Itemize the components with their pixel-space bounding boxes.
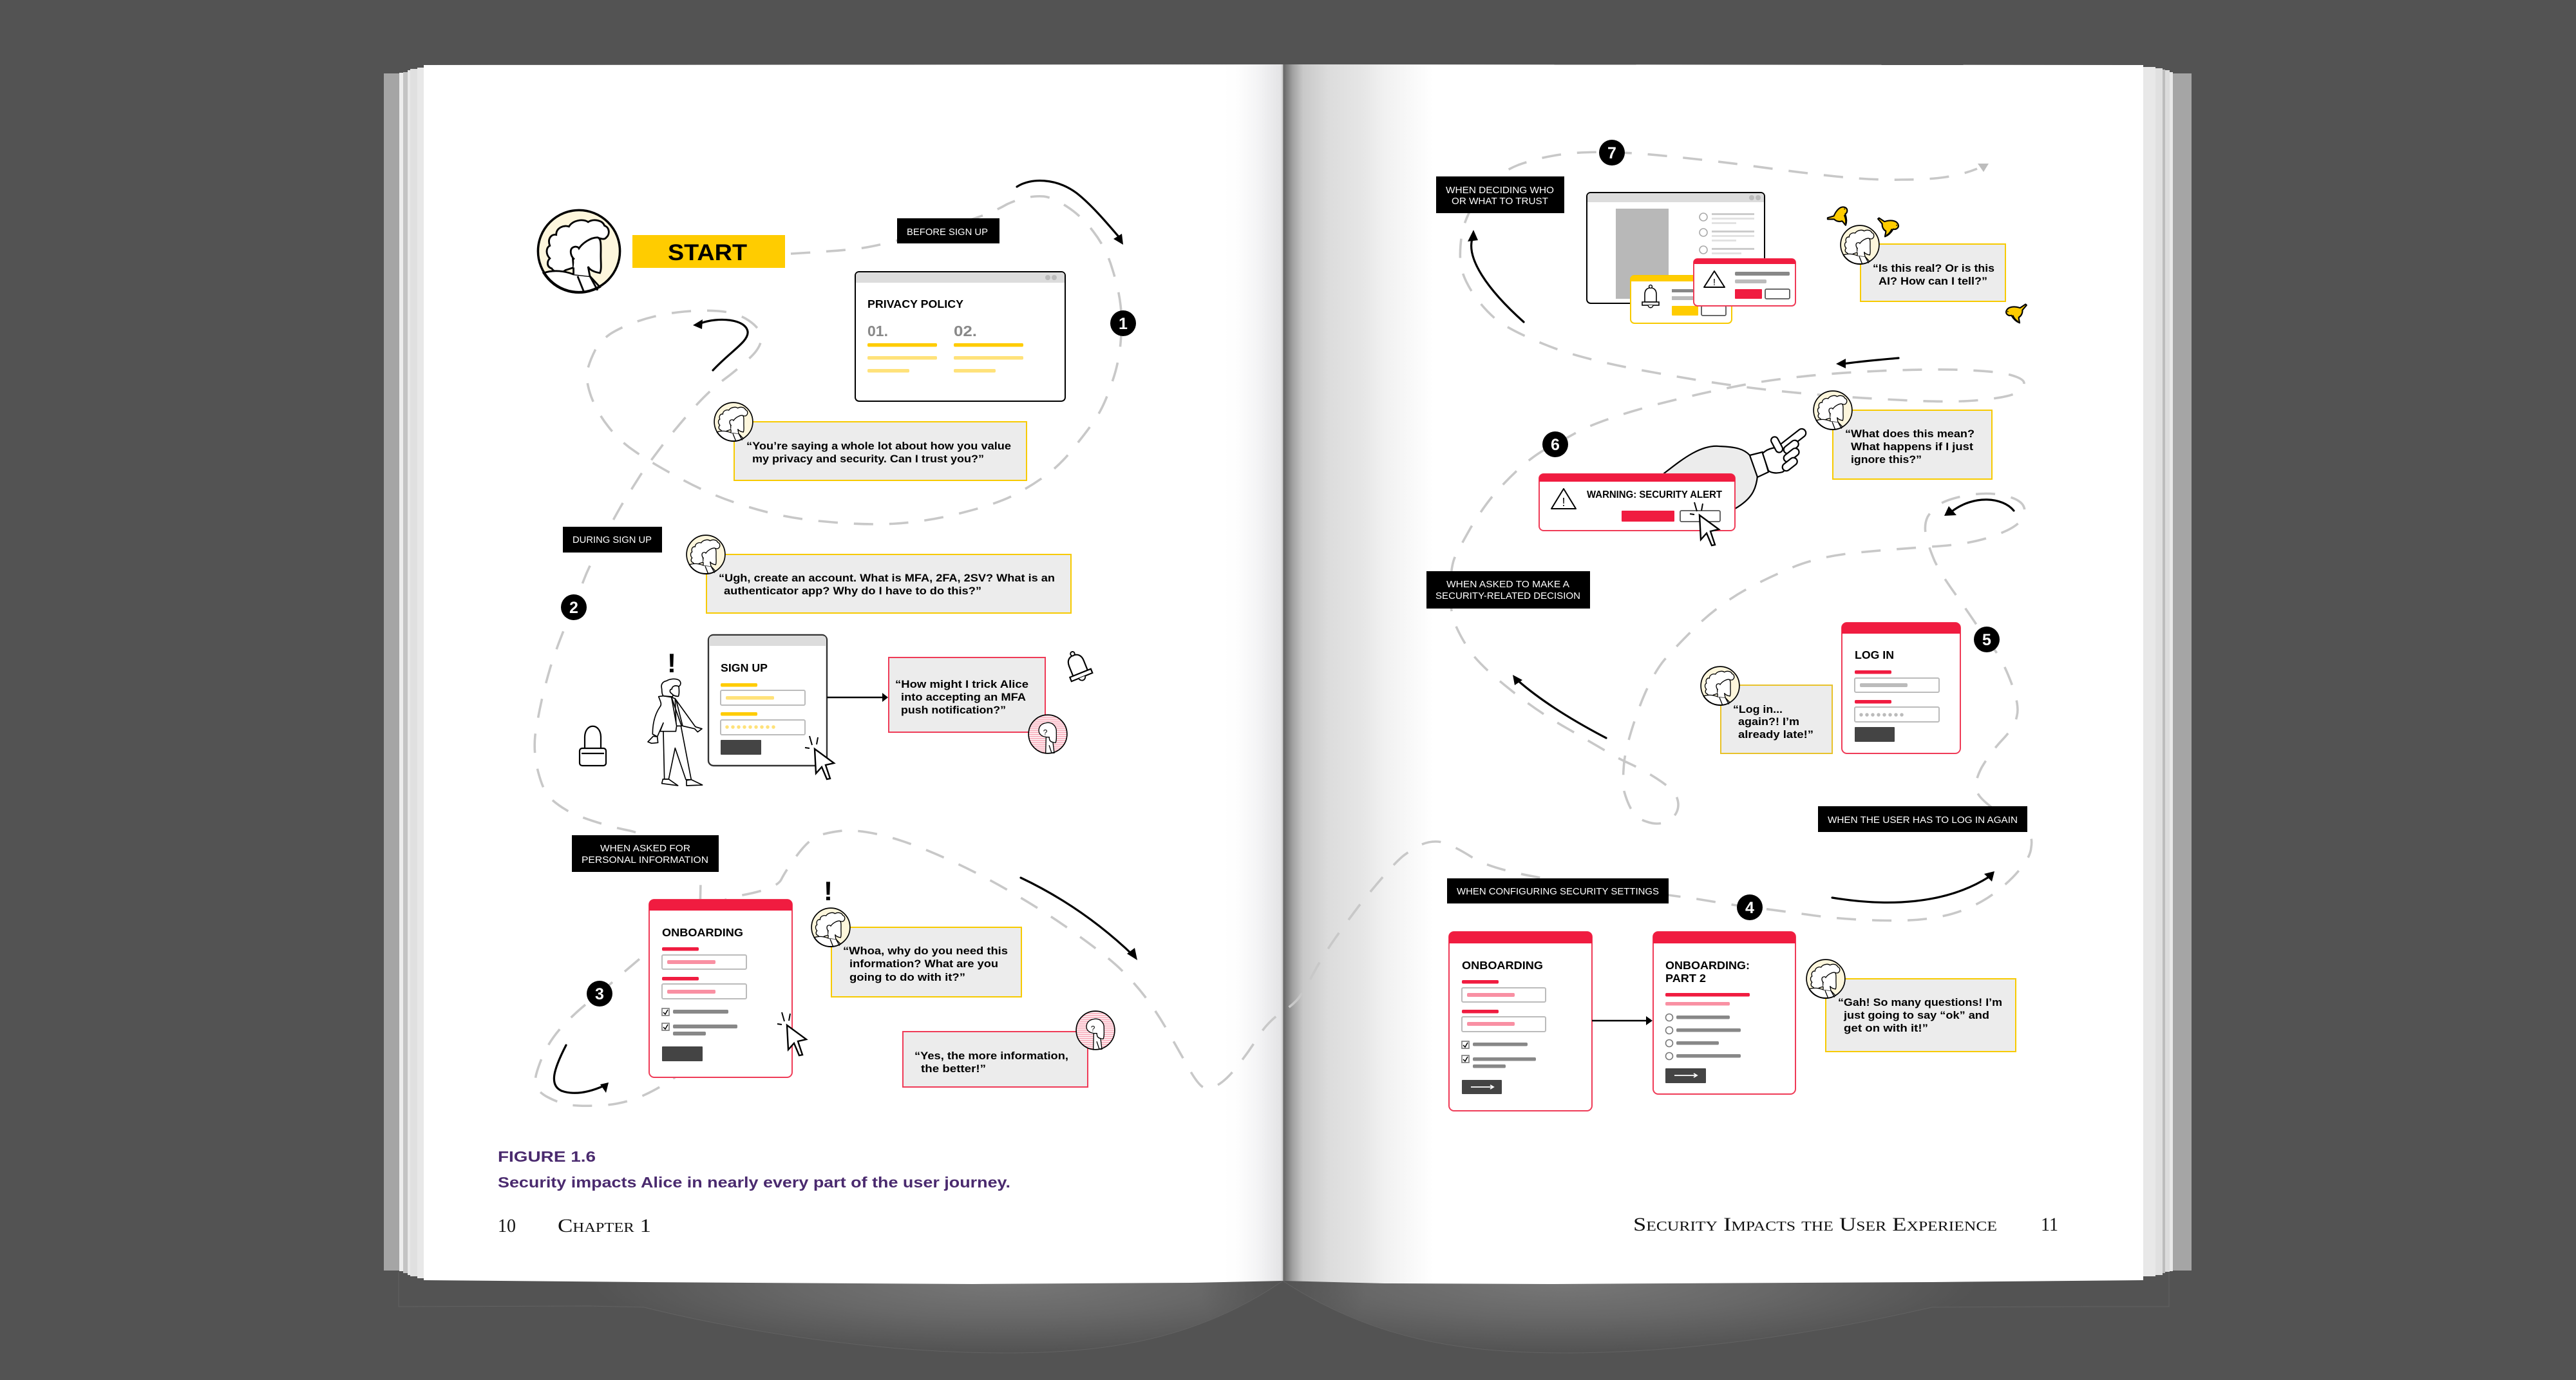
curved arrow step 5	[1944, 500, 2014, 516]
speech bubble: create an account	[706, 554, 1071, 613]
onboarding card part 2: ONBOARDING:	[1665, 959, 1750, 972]
left page footer	[498, 1215, 651, 1236]
label: before sign up	[897, 218, 999, 243]
looping arrow	[693, 319, 748, 370]
speech bubble: attacker MFA	[889, 657, 1045, 732]
long arrow to decision	[1513, 675, 1606, 738]
privacy policy window: PRIVACY POLICY	[867, 298, 963, 310]
icon: lock	[580, 726, 606, 766]
left page	[424, 64, 1283, 1284]
speech bubble: so many questions: “Gah! So many questions! I’m	[1838, 997, 2002, 1008]
step number 6	[1542, 431, 1568, 457]
dashed journey path	[535, 152, 2032, 1106]
speech bubble: log in again	[1721, 685, 1832, 753]
step number 3: 3	[595, 985, 604, 1003]
arrow between cards	[1592, 1016, 1653, 1025]
label: personal information	[572, 835, 719, 872]
label: log in again	[1818, 806, 2027, 832]
step number 6: 6	[1551, 436, 1560, 454]
label: who or what to trust	[1436, 176, 1564, 213]
red alert: !	[1713, 277, 1716, 288]
step number 5: 5	[1982, 631, 1991, 649]
right page footer: 11	[2041, 1214, 2058, 1235]
speech bubble: can I trust you: “You’re saying a whole lot about how you value	[746, 440, 1011, 452]
step number 5	[1974, 627, 2000, 652]
speech bubble: log in again: already late!”	[1738, 729, 1814, 741]
pointing hand with sleeve	[1664, 427, 1808, 509]
start label	[632, 235, 785, 268]
exclamation mark: !	[824, 876, 833, 906]
speech bubble: attacker MFA: push notification?”	[901, 704, 1006, 716]
shadow under right page	[1320, 1282, 1898, 1338]
cursor	[777, 1012, 806, 1055]
step number 1: 1	[1119, 315, 1128, 333]
warning dialog	[1539, 474, 1735, 531]
shadow under left page	[672, 1281, 1246, 1338]
right page footer: Security Impacts the User Experience	[1633, 1214, 1997, 1235]
sign up window	[708, 635, 827, 766]
curved arrow 1	[1017, 181, 1123, 245]
speech bubble: create an account: authenticator app? Why do I have to do this?”	[724, 585, 981, 597]
cursor	[805, 736, 834, 779]
figure caption: FIGURE 1.6	[498, 1148, 596, 1165]
speech bubble: log in again: again?! I’m	[1738, 716, 1799, 728]
label: security decision: WHEN ASKED TO MAKE A	[1446, 580, 1569, 590]
Alice avatar small	[714, 402, 753, 441]
step number 2	[561, 594, 587, 620]
left page edge stack	[384, 68, 424, 1278]
cursor	[1690, 502, 1719, 545]
speech bubble: so many questions: get on with it!”	[1844, 1023, 1928, 1034]
speech bubble: why do you need	[831, 927, 1021, 997]
onboarding card	[649, 900, 792, 1077]
warning dialog: WARNING: SECURITY ALERT	[1587, 489, 1722, 500]
speech bubble: the more information: the better!”	[921, 1063, 986, 1075]
speech bubble: so many questions	[1826, 979, 2016, 1052]
speech bubble: can I trust you: my privacy and security. Can I trust you?”	[752, 453, 984, 465]
step number 3	[587, 981, 612, 1007]
speech bubble: what does this mean: What happens if I just	[1851, 441, 1974, 453]
label: personal information: WHEN ASKED FOR	[600, 844, 690, 854]
curved arrow step 3	[554, 1045, 609, 1093]
Alice avatar small	[1841, 225, 1879, 264]
privacy policy window: 02.	[954, 323, 977, 339]
Alice avatar small	[1701, 666, 1739, 705]
speech bubble: can I trust you	[734, 422, 1027, 480]
speech bubble: why do you need: going to do with it?”	[849, 972, 965, 983]
icon: bell	[1061, 648, 1094, 685]
speech bubble: why do you need: “Whoa, why do you need this	[843, 945, 1008, 957]
walking figure of Alice	[648, 679, 703, 786]
left page footer: 10	[498, 1215, 516, 1236]
label: security settings	[1447, 878, 1669, 903]
right page	[1283, 64, 2143, 1284]
speech bubble: attacker MFA: into accepting an MFA	[901, 692, 1026, 703]
attacker avatar	[1028, 715, 1067, 753]
label: security decision	[1426, 571, 1590, 609]
speech bubble: attacker MFA: “How might I trick Alice	[895, 679, 1028, 690]
speech bubble: is this real: “Is this real? Or is this	[1873, 263, 1994, 274]
step number 7	[1599, 140, 1625, 165]
speech bubble: log in again: “Log in...	[1733, 704, 1783, 715]
label: before sign up: BEFORE SIGN UP	[907, 227, 988, 238]
speech bubble: the more information: “Yes, the more information,	[914, 1050, 1068, 1062]
privacy policy window: 01.	[867, 323, 888, 339]
onboarding card: ONBOARDING	[662, 926, 743, 939]
attacker avatar	[1076, 1011, 1115, 1050]
Alice avatar small	[1814, 391, 1852, 430]
news window	[1587, 193, 1765, 303]
speech bubble: is this real	[1861, 244, 2005, 301]
speech bubble: what does this mean: “What does this mean?	[1845, 428, 1975, 440]
label: during sign up	[563, 527, 662, 553]
label: during sign up: DURING SIGN UP	[573, 535, 652, 545]
speech bubble: what does this mean: ignore this?”	[1851, 454, 1922, 466]
step number 7: 7	[1607, 144, 1616, 162]
label: security decision: SECURITY-RELATED DECISION	[1435, 591, 1580, 601]
step number 4	[1737, 894, 1763, 920]
exclamation mark: !	[667, 648, 676, 678]
large Alice avatar	[538, 210, 620, 293]
right page edge stack	[2143, 67, 2192, 1276]
log in card: LOG IN	[1855, 648, 1894, 661]
speech bubble: why do you need: information? What are you	[849, 958, 998, 970]
red alert	[1694, 259, 1795, 306]
figure caption: Security impacts Alice in nearly every part of the user journey.	[498, 1174, 1010, 1191]
step number 1	[1110, 310, 1136, 336]
label: who or what to trust: OR WHAT TO TRUST	[1452, 196, 1548, 207]
arrow to attacker thought	[827, 693, 888, 702]
onboarding card part 2: PART 2	[1665, 972, 1706, 985]
label: who or what to trust: WHEN DECIDING WHO	[1446, 185, 1554, 196]
path end triangle	[1978, 164, 1989, 172]
figure caption	[498, 1148, 1010, 1191]
speech bubble: what does this mean	[1833, 410, 1992, 479]
curved arrow step 4	[1832, 871, 1994, 902]
log in card	[1842, 623, 1960, 753]
Alice avatar small	[687, 535, 725, 574]
privacy policy window	[855, 272, 1065, 401]
curved arrow step 7	[1468, 230, 1524, 322]
speech bubble: create an account: “Ugh, create an account. What is MFA, 2FA, 2SV? What is an	[719, 572, 1055, 584]
onboarding card part 1: ONBOARDING	[1462, 959, 1543, 972]
yellow birds	[1828, 207, 2031, 324]
speech bubble: the more information	[903, 1032, 1088, 1087]
Alice avatar small	[811, 908, 850, 947]
Alice avatar small	[1806, 959, 1845, 998]
long arrow	[1021, 878, 1137, 960]
label: personal information: PERSONAL INFORMATION	[582, 855, 708, 865]
arrow left	[1836, 358, 1899, 368]
speech bubble: is this real: AI? How can I tell?”	[1879, 276, 1987, 287]
onboarding card part 2	[1653, 932, 1795, 1094]
left page footer: Chapter 1	[558, 1215, 651, 1236]
start label: START	[668, 240, 747, 265]
warning dialog: !	[1562, 496, 1566, 509]
label: log in again: WHEN THE USER HAS TO LOG IN AGAIN	[1828, 815, 2018, 826]
yellow alert	[1631, 276, 1732, 323]
step number 4: 4	[1745, 899, 1754, 917]
book spread mockup	[384, 64, 2192, 1354]
speech bubble: so many questions: just going to say “ok” and	[1843, 1010, 1989, 1021]
label: security settings: WHEN CONFIGURING SECURITY SETTINGS	[1457, 887, 1659, 897]
sign up window: SIGN UP	[721, 661, 768, 674]
onboarding card part 1	[1449, 932, 1592, 1111]
step number 2: 2	[569, 599, 578, 617]
